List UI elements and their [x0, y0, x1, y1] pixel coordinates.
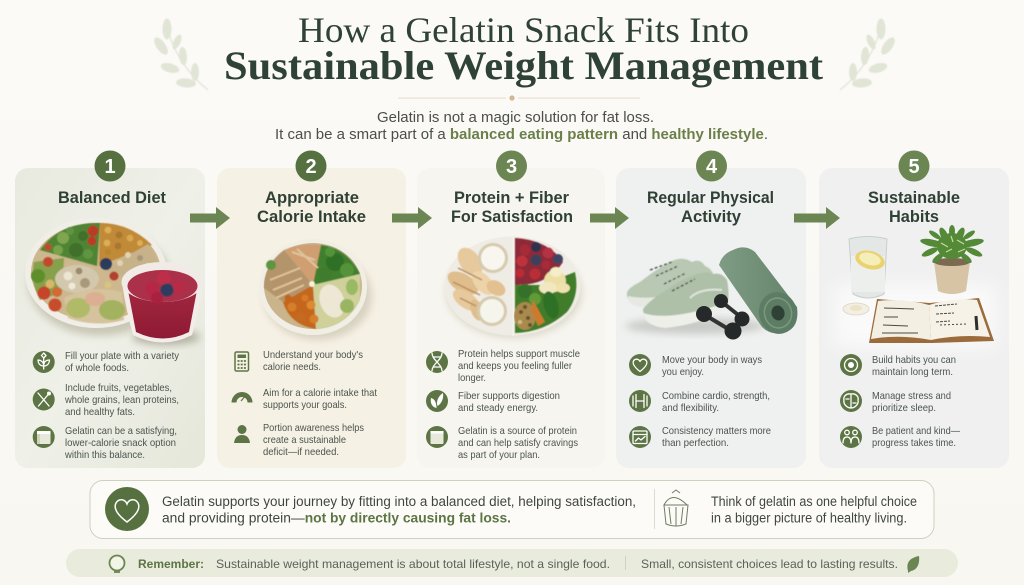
icon: light bulb [110, 556, 124, 572]
bullet: fruits and vegetables: whole grains, lean proteins, [64, 395, 179, 406]
heading [257, 188, 366, 226]
bullet: dumbbell: Combine cardio, strength, [662, 391, 770, 402]
arrow 3 to 4 [590, 207, 629, 229]
decoration: right laurel sprig [840, 18, 897, 90]
subtitle [275, 110, 768, 143]
bullet: calendar [629, 426, 771, 449]
heading [451, 188, 573, 226]
bullet: target [840, 354, 956, 378]
icon: gelatin dessert [664, 490, 688, 526]
bullet: gelatin snack: within this balance. [64, 450, 145, 461]
arrow 2 to 3 [392, 207, 432, 229]
subtitle: It can be a smart part of a balanced eating pattern and healthy lifestyle . [275, 127, 768, 143]
number badge 2: 2 [305, 156, 317, 178]
heading: Calorie Intake [257, 207, 366, 226]
bullet: fruits and vegetables: and healthy fats. [65, 407, 135, 418]
callout: gelatin supports your journey [90, 480, 934, 538]
heading: Habits [889, 207, 939, 226]
bullet: whole foods [33, 351, 180, 374]
bullet: gauge [232, 388, 377, 411]
panel: 4 regular physical activity [616, 150, 806, 468]
illustration: plate of whole foods and gelatin cup [25, 218, 204, 345]
bullet: gelatin snack: Gelatin can be a satisfying, [65, 426, 177, 437]
title divider [398, 95, 640, 101]
callout text [162, 494, 636, 526]
heading: Protein + Fiber [454, 188, 569, 207]
footer text [138, 558, 898, 571]
bullet: brain [840, 390, 951, 414]
footer text: Remember: [138, 558, 204, 571]
heading: Appropriate [265, 188, 359, 207]
bullet: person: deficit—if needed. [263, 447, 339, 458]
bullet: person: create a sustainable [263, 435, 346, 446]
bullet: heart: Move your body in ways [662, 355, 762, 366]
number badge 5 [898, 150, 930, 182]
number badge 4: 4 [706, 156, 718, 178]
callout side text [711, 494, 917, 526]
bullet: target: maintain long term. [872, 367, 953, 378]
bullet: dna [426, 349, 580, 384]
bullet: leaf [426, 390, 560, 414]
bullet: dna: Protein helps support muscle [458, 349, 580, 360]
number badge 2 [296, 150, 326, 182]
footer banner: remember [66, 549, 958, 577]
number badge 1 [94, 150, 126, 182]
panel: 1 balanced diet [15, 150, 205, 468]
callout side text: Think of gelatin as one helpful choice [711, 494, 917, 509]
number badge 5: 5 [908, 156, 920, 178]
bullet: calendar: Consistency matters more [662, 426, 771, 437]
icon: leaf [907, 556, 919, 573]
heading [647, 188, 774, 226]
bullet: people: progress takes time. [872, 438, 956, 449]
heading [868, 188, 960, 226]
bullet: leaf: Fiber supports digestion [458, 391, 560, 402]
callout side text: in a bigger picture of healthy living. [711, 510, 907, 526]
bullet: calculator [235, 350, 363, 373]
arrow 4 to 5 [794, 207, 840, 229]
bullet: whole foods: Fill your plate with a variety [65, 351, 180, 362]
bullet: gelatin snack: lower-calorie snack option [65, 438, 176, 449]
footer text: Small, consistent choices lead to lasting results. [641, 558, 898, 571]
bullet: people [840, 426, 961, 449]
bullet: whole foods: of whole foods. [65, 363, 129, 374]
bullet: calculator: Understand your body's [263, 350, 363, 361]
bullet: target: Build habits you can [872, 355, 956, 366]
bullet: gelatin cup: as part of your plan. [458, 450, 540, 461]
callout text: and providing protein— not by directly causing fat loss. [162, 510, 511, 526]
panel: 3 protein and fiber [417, 150, 605, 468]
bullet: brain: Manage stress and [872, 391, 951, 402]
arrow 1 to 2 [190, 207, 230, 229]
bullet: brain: prioritize sleep. [872, 403, 936, 414]
bullet: leaf: and steady energy. [458, 403, 538, 414]
icon: heart [105, 487, 149, 531]
panel: 2 appropriate calorie intake [217, 150, 406, 468]
bullet: calendar: than perfection. [662, 438, 729, 449]
heading: Sustainable [868, 188, 960, 207]
decoration: left laurel sprig [152, 18, 208, 90]
illustration: portioned bowl [259, 239, 372, 340]
subtitle: Gelatin is not a magic solution for fat loss. [377, 110, 654, 126]
number badge 1: 1 [104, 156, 116, 178]
bullet: gelatin snack [33, 426, 177, 461]
bullet: person: Portion awareness helps [263, 423, 364, 434]
bullet: gauge: supports your goals. [263, 400, 347, 411]
bullet: dna: longer. [458, 373, 486, 384]
bullet: person [234, 423, 364, 458]
bullet: gauge: Aim for a calorie intake that [263, 388, 377, 399]
bullet: gelatin cup: and can help satisfy cravings [458, 438, 578, 449]
bullet: gelatin cup [426, 426, 578, 461]
illustration: water, plant and journal [835, 225, 995, 347]
heading: Balanced Diet [58, 188, 166, 207]
callout text: Gelatin supports your journey by fitting into a balanced diet, helping satisfaction, [162, 494, 636, 509]
number badge 3 [496, 150, 527, 182]
bullet: fruits and vegetables [33, 383, 179, 418]
bullet: people: Be patient and kind— [872, 426, 961, 437]
number badge 4 [696, 150, 727, 182]
bullet: dna: and keeps you feeling fuller [458, 361, 573, 372]
illustration: shoes, dumbbells and yoga mat [625, 247, 802, 340]
bullet: dumbbell [629, 390, 770, 414]
bullet: heart: you enjoy. [662, 367, 704, 378]
heading: Regular Physical [647, 188, 774, 207]
bullet: gelatin cup: Gelatin is a source of protein [458, 426, 577, 437]
illustration: divided plate [444, 236, 582, 338]
bullet: dumbbell: and flexibility. [662, 403, 719, 414]
title: Sustainable Weight Management [224, 43, 824, 88]
panel: 5 sustainable habits [819, 150, 1009, 468]
heading: For Satisfaction [451, 207, 573, 226]
title: How a Gelatin Snack Fits Into [298, 10, 749, 50]
heading: Activity [681, 207, 742, 226]
bullet: heart [629, 354, 762, 378]
number badge 3: 3 [506, 156, 517, 178]
title [224, 10, 824, 88]
footer text: Sustainable weight management is about total lifestyle, not a single food. [216, 558, 610, 571]
bullet: fruits and vegetables: Include fruits, vegetables, [65, 383, 172, 394]
bullet: calculator: calorie needs. [263, 362, 321, 373]
